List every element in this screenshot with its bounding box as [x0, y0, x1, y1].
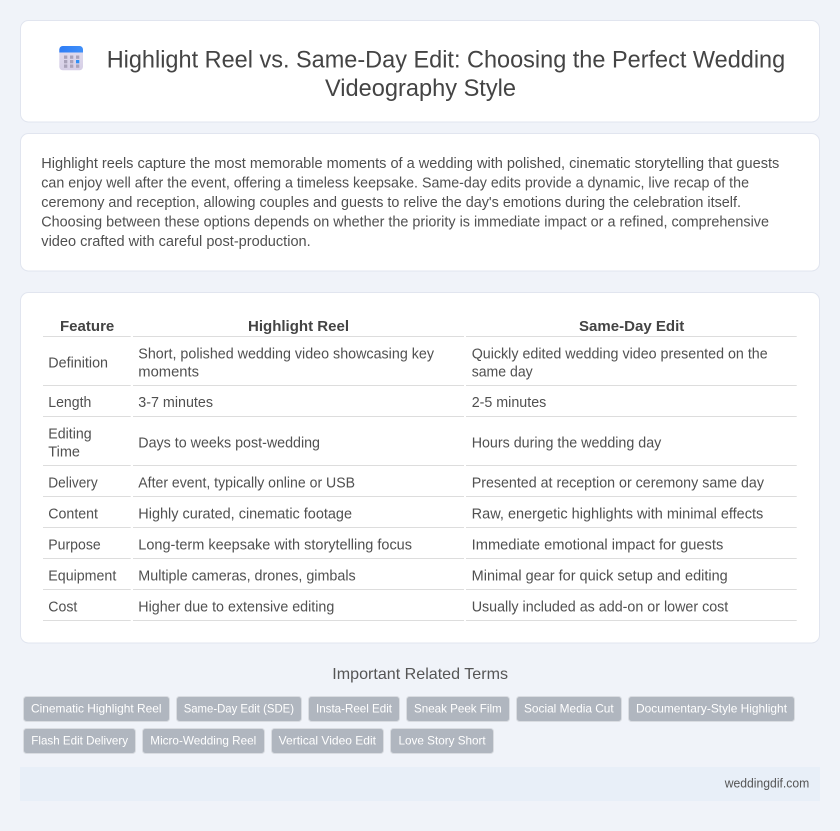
table row: content: Content	[48, 506, 98, 522]
text block: introduction: video crafted with careful post-production.	[41, 234, 311, 250]
footer: weddingdif.com	[724, 776, 809, 791]
text block: introduction: ceremony and reception, allowing couples and guests to relive the day's emotions during the celebration itself.	[41, 195, 741, 211]
table row: delivery: After event, typically online or USB	[138, 475, 355, 491]
title: Videography Style	[325, 75, 516, 102]
tag: documentary-style highlight: Documentary-Style Highlight	[636, 702, 788, 716]
tag: flash edit delivery: Flash Edit Delivery	[31, 734, 128, 748]
tag: social media cut: Social Media Cut	[524, 702, 614, 716]
table row: cost	[43, 599, 797, 621]
tag: social media cut	[516, 696, 622, 722]
table row: length	[43, 395, 797, 417]
tag: same-day edit	[176, 696, 302, 722]
text block: introduction: Highlight reels capture the most memorable moments of a wedding with polished, cinematic storytelling that guests	[41, 156, 779, 172]
tag: insta-reel edit: Insta-Reel Edit	[316, 702, 393, 716]
table row: definition: same day	[472, 364, 533, 380]
table row: definition: Short, polished wedding video showcasing key	[138, 347, 435, 363]
table row: equipment: Multiple cameras, drones, gimbals	[138, 568, 356, 584]
table row: equipment: Equipment	[48, 568, 116, 584]
table row: length: 3-7 minutes	[138, 395, 213, 411]
icon: calendar	[59, 46, 83, 70]
table row: editing time	[43, 427, 797, 466]
table header row: Highlight Reel	[248, 318, 349, 335]
table row: definition: Definition	[48, 356, 108, 372]
tag: vertical video edit: Vertical Video Edit	[279, 734, 377, 748]
table row: delivery: Delivery	[48, 475, 98, 491]
tag: sneak peek film: Sneak Peek Film	[414, 702, 502, 716]
tag: cinematic highlight reel: Cinematic Highlight Reel	[31, 702, 162, 716]
tag: documentary-style highlight	[628, 696, 794, 722]
table row: cost: Higher due to extensive editing	[138, 599, 334, 615]
table row: purpose: Long-term keepsake with storytelling focus	[138, 537, 412, 553]
table row: length: 2-5 minutes	[472, 395, 546, 411]
table row: purpose: Immediate emotional impact for guests	[472, 537, 723, 553]
table row: definition: moments	[138, 364, 199, 380]
table row: editing time: Hours during the wedding day	[472, 436, 662, 452]
table row: length: Length	[48, 395, 91, 411]
table row: content: Raw, energetic highlights with minimal effects	[472, 506, 763, 522]
table header row	[43, 318, 797, 337]
heading: important related terms: Important Related Terms	[332, 666, 508, 683]
table row: editing time: Editing	[48, 427, 92, 443]
text block: introduction: Choosing between these options depends on whether the priority is immediate impact or a refined, comprehensive	[41, 214, 769, 230]
table row: editing time: Days to weeks post-wedding	[138, 436, 320, 452]
tag list: related terms	[24, 696, 794, 754]
table row: cost: Cost	[48, 599, 77, 615]
tag: micro-wedding reel: Micro-Wedding Reel	[150, 734, 256, 748]
table row: purpose: Purpose	[48, 537, 101, 553]
panel: introduction paragraph	[20, 134, 820, 271]
text block: introduction	[41, 156, 779, 250]
text block: introduction: can enjoy well after the event, offering a timeless keepsake. Same-day edits provide a dynamic, live recap of the	[41, 176, 749, 192]
table row: equipment: Minimal gear for quick setup and editing	[472, 568, 728, 584]
tag: love story short: Love Story Short	[398, 734, 486, 748]
table row: content	[43, 506, 797, 528]
table row: definition: Quickly edited wedding video presented on the	[472, 347, 768, 363]
table row: purpose	[43, 537, 797, 559]
panel: comparison table	[20, 292, 820, 643]
title	[107, 46, 785, 102]
table row: delivery: Presented at reception or ceremony same day	[472, 475, 765, 491]
table header row: Feature	[60, 318, 114, 335]
table row: delivery	[43, 475, 797, 497]
table row: cost: Usually included as add-on or lower cost	[472, 599, 728, 615]
table row: editing time: Time	[48, 444, 80, 460]
tag: micro-wedding reel	[142, 728, 264, 754]
table header row: Same-Day Edit	[579, 318, 684, 335]
table row: equipment	[43, 568, 797, 590]
tag: same-day edit: Same-Day Edit (SDE)	[184, 702, 294, 716]
tag: insta-reel edit	[308, 696, 400, 722]
title: Highlight Reel vs. Same-Day Edit: Choosing the Perfect Wedding	[107, 46, 785, 74]
tag: flash edit delivery	[24, 728, 136, 754]
table row: content: Highly curated, cinematic footage	[138, 506, 352, 522]
tag: love story short	[390, 728, 494, 754]
tag: cinematic highlight reel	[24, 696, 170, 722]
tag: sneak peek film	[406, 696, 510, 722]
panel: title header	[20, 20, 820, 122]
footer	[20, 767, 820, 801]
table row: definition	[43, 347, 797, 386]
tag: vertical video edit	[272, 728, 384, 754]
